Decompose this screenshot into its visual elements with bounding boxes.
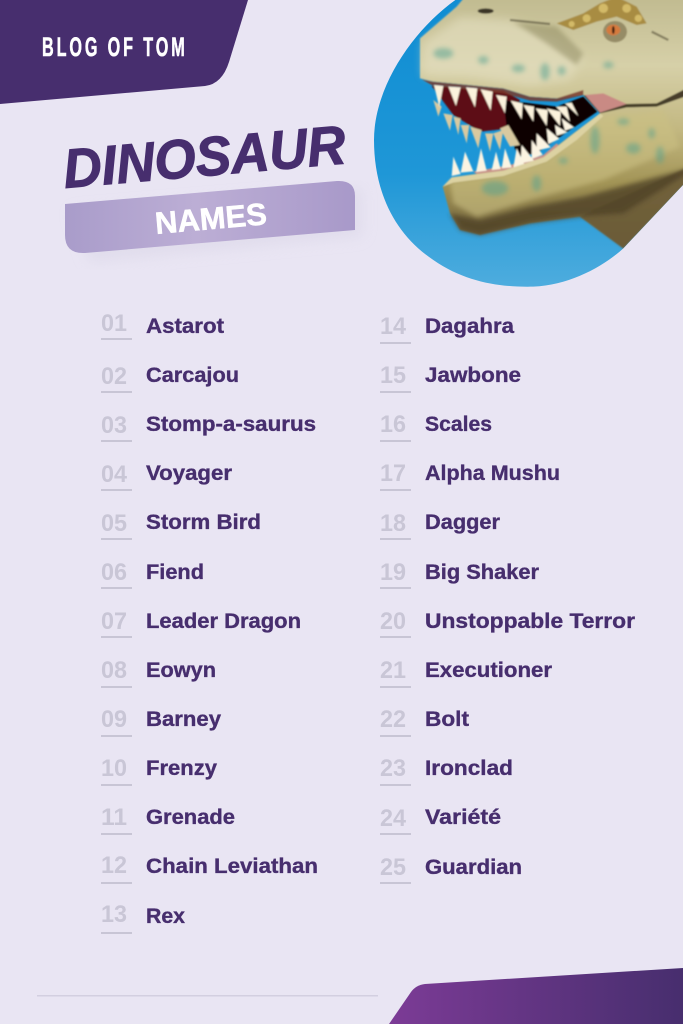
item 03: Stomp-a-saurus xyxy=(146,413,316,436)
item 13 xyxy=(101,901,185,934)
item 12: 12 xyxy=(101,852,127,879)
item 15 xyxy=(380,362,521,393)
item 01 xyxy=(101,310,224,340)
item 11: Grenade xyxy=(146,806,235,829)
item 19: 19 xyxy=(380,559,406,586)
item 13: Rex xyxy=(146,905,185,928)
item 24: 24 xyxy=(380,805,407,832)
item 04: Voyager xyxy=(146,462,232,485)
lower jaw light xyxy=(450,137,676,218)
item 11: 11 xyxy=(101,804,127,831)
item 18: 18 xyxy=(380,510,406,537)
item 03 xyxy=(101,412,316,442)
item 03: 03 xyxy=(101,412,127,439)
item 22 xyxy=(380,706,469,737)
sky xyxy=(370,0,683,290)
mouth line to jaw hinge xyxy=(582,89,683,114)
item 07: Leader Dragon xyxy=(146,610,301,633)
item 14 xyxy=(380,313,514,344)
item 10: Frenzy xyxy=(146,757,217,780)
brow crest xyxy=(557,0,647,30)
upper teeth xyxy=(434,85,578,126)
subtitle: Names: NAMES xyxy=(154,196,268,241)
item 17: Alpha Mushu xyxy=(425,462,560,485)
upper back teeth xyxy=(433,100,520,152)
item 23: 23 xyxy=(380,755,406,782)
item 22: 22 xyxy=(380,706,406,733)
nostril xyxy=(478,8,494,14)
footer accent shape xyxy=(389,968,683,1024)
item 07 xyxy=(101,608,301,638)
item 25 xyxy=(380,854,522,884)
item 21 xyxy=(380,657,552,688)
lower teeth xyxy=(452,118,574,176)
item 13: 13 xyxy=(101,901,127,928)
crest highlights xyxy=(569,4,642,27)
item 19: Big Shaker xyxy=(425,561,539,584)
gum xyxy=(585,93,627,113)
mouth interior: dark xyxy=(503,97,597,157)
item 06: 06 xyxy=(101,559,127,586)
item 18 xyxy=(380,510,500,540)
item 08: 08 xyxy=(101,657,127,684)
subtitle bar xyxy=(65,181,355,253)
item 12: Chain Leviathan xyxy=(146,855,318,878)
item 18: Dagger xyxy=(425,511,500,534)
item 08: Eowyn xyxy=(146,659,216,682)
item 20: 20 xyxy=(380,608,406,635)
item 10: 10 xyxy=(101,755,127,782)
item 15: Jawbone xyxy=(425,364,521,387)
item 25: 25 xyxy=(380,854,406,881)
item 01: 01 xyxy=(101,310,127,337)
item 22: Bolt xyxy=(425,708,469,731)
eye xyxy=(603,21,627,42)
item 24 xyxy=(380,805,501,835)
name list: left column xyxy=(101,310,318,934)
item 14: Dagahra xyxy=(425,315,514,338)
item 17 xyxy=(380,460,560,491)
header banner xyxy=(0,0,248,104)
item 16: 16 xyxy=(380,411,406,438)
dinosaur photo xyxy=(370,0,683,290)
item 19 xyxy=(380,559,539,589)
title block xyxy=(61,114,362,262)
item 06: Fiend xyxy=(146,561,204,584)
item 25: Guardian xyxy=(425,856,522,879)
item 20: Unstoppable Terror xyxy=(425,610,635,633)
title: Dinosaur: DINOSAUR xyxy=(61,114,348,200)
jaw shadow xyxy=(450,163,683,235)
item 10 xyxy=(101,755,217,786)
snout highlight xyxy=(423,17,583,87)
mouth interior: red xyxy=(432,86,520,132)
item 02 xyxy=(101,363,239,393)
item 04: 04 xyxy=(101,461,128,488)
item 21: 21 xyxy=(380,657,406,684)
item 21: Executioner xyxy=(425,659,552,682)
neck shadow xyxy=(580,160,683,248)
dinosaur head xyxy=(420,0,683,248)
item 17: 17 xyxy=(380,460,406,487)
item 08 xyxy=(101,657,216,688)
upper lip xyxy=(422,79,583,102)
item 02: Carcajou xyxy=(146,364,239,387)
item 12 xyxy=(101,852,318,884)
blog name: BLOG OF TOM xyxy=(42,32,188,62)
item 07: 07 xyxy=(101,608,127,635)
item 09 xyxy=(101,706,221,737)
item 24: Variété xyxy=(425,806,501,829)
item 14: 14 xyxy=(380,313,407,340)
item 23 xyxy=(380,755,513,786)
item 01: Astarot xyxy=(146,315,224,338)
item 05: 05 xyxy=(101,510,127,537)
lower jaw rim xyxy=(443,113,603,187)
item 20 xyxy=(380,608,635,638)
item 15: 15 xyxy=(380,362,406,389)
item 06 xyxy=(101,559,204,589)
name list: right column xyxy=(380,313,635,884)
green patches xyxy=(433,48,664,196)
item 05: Storm Bird xyxy=(146,511,261,534)
lower gum xyxy=(473,143,560,174)
item 05 xyxy=(101,510,261,540)
item 16: Scales xyxy=(425,413,492,436)
item 23: Ironclad xyxy=(425,757,513,780)
item 02: 02 xyxy=(101,363,127,390)
item 09: 09 xyxy=(101,706,127,733)
item 16 xyxy=(380,411,492,442)
item 09: Barney xyxy=(146,708,221,731)
skin creases xyxy=(510,20,668,40)
item 04 xyxy=(101,461,232,491)
subtitle bar shadow xyxy=(72,188,362,262)
item 11 xyxy=(101,804,235,835)
cheek shade xyxy=(513,22,583,65)
